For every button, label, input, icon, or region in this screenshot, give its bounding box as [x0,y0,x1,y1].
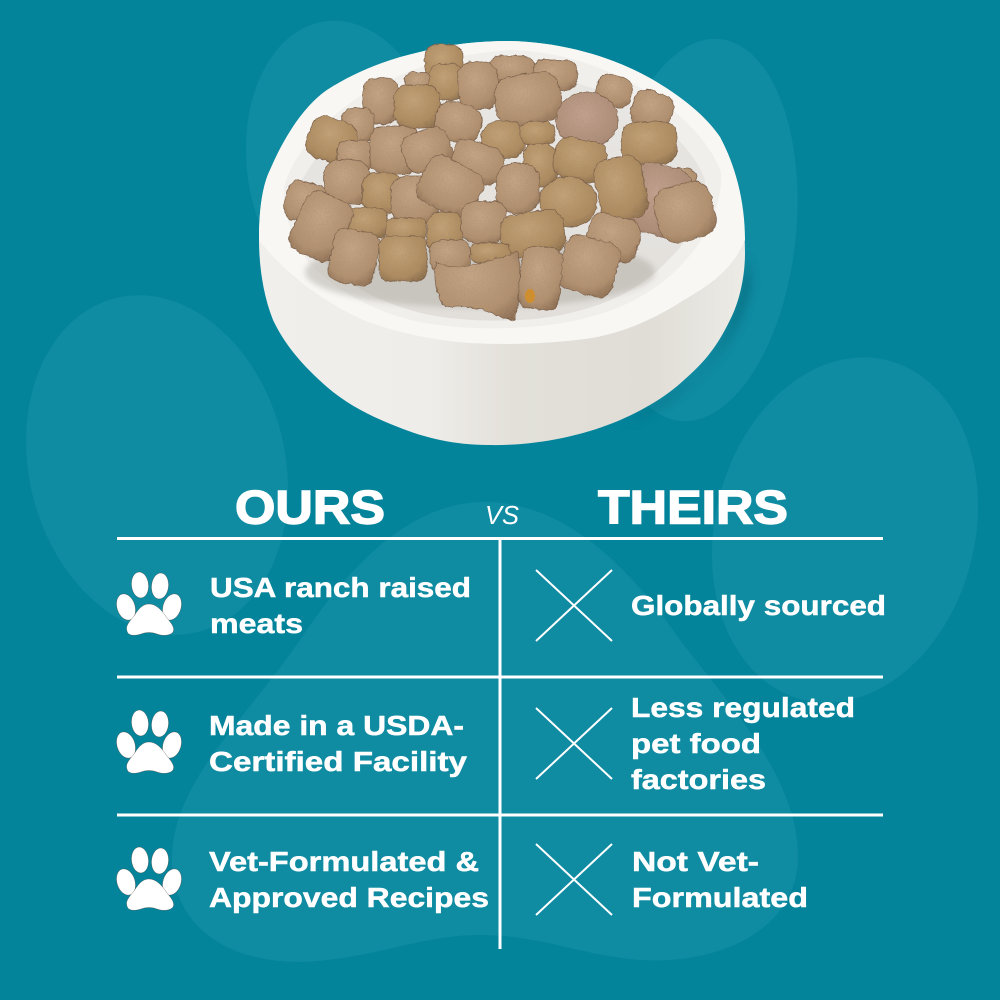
text: less regulated pet food factories: pet food [631,728,761,759]
text: usa ranch raised meats: meats [210,608,303,639]
text: vet-formulated and approved recipes: Vet-Formulated & [209,846,479,877]
bowl rim highlight [259,41,745,344]
text: less regulated pet food factories [631,692,855,795]
food bowl photo illustration [259,41,750,445]
text: less regulated pet food factories: Less regulated [631,692,855,723]
text: made in a usda-certified facility [209,710,467,777]
text: usa ranch raised meats: USA ranch raised [210,572,471,603]
icon: paw [113,846,185,910]
icon: paw [113,571,185,635]
kibble pile [281,44,720,320]
row 2 theirs [536,692,855,795]
icon: cross [536,570,612,641]
text: not vet-formulated: Not Vet- [632,846,759,877]
text: not vet-formulated: Formulated [632,882,808,913]
text: globally sourced: Globally sourced [631,590,886,621]
text: vet-formulated and approved recipes [209,846,489,913]
row 1 theirs [536,570,886,641]
comparison table grid [117,537,883,949]
text: made in a usda-certified facility: Made in a USDA- [209,710,464,741]
bowl body [259,41,745,445]
icon: cross [536,844,612,915]
icon: paw [113,709,185,773]
carrot speck [525,289,535,303]
column heading: theirs: THEIRS [598,480,788,534]
food shadow [305,236,655,308]
row 1 ours [113,571,471,639]
row 3 theirs [536,844,808,915]
text: made in a usda-certified facility: Certified Facility [209,746,467,777]
bowl inner floor [292,72,705,321]
text: not vet-formulated [632,846,808,913]
text: less regulated pet food factories: factories [631,764,766,795]
text: usa ranch raised meats [210,572,471,639]
row 2 ours [113,709,467,777]
text: vet-formulated and approved recipes: Approved Recipes [209,882,489,913]
bowl shadow [625,255,750,425]
bowl inner wall [284,50,721,328]
vs label: VS [485,500,520,530]
icon: cross [536,708,612,779]
column heading: ours: OURS [235,480,385,534]
row 3 ours [113,846,489,913]
